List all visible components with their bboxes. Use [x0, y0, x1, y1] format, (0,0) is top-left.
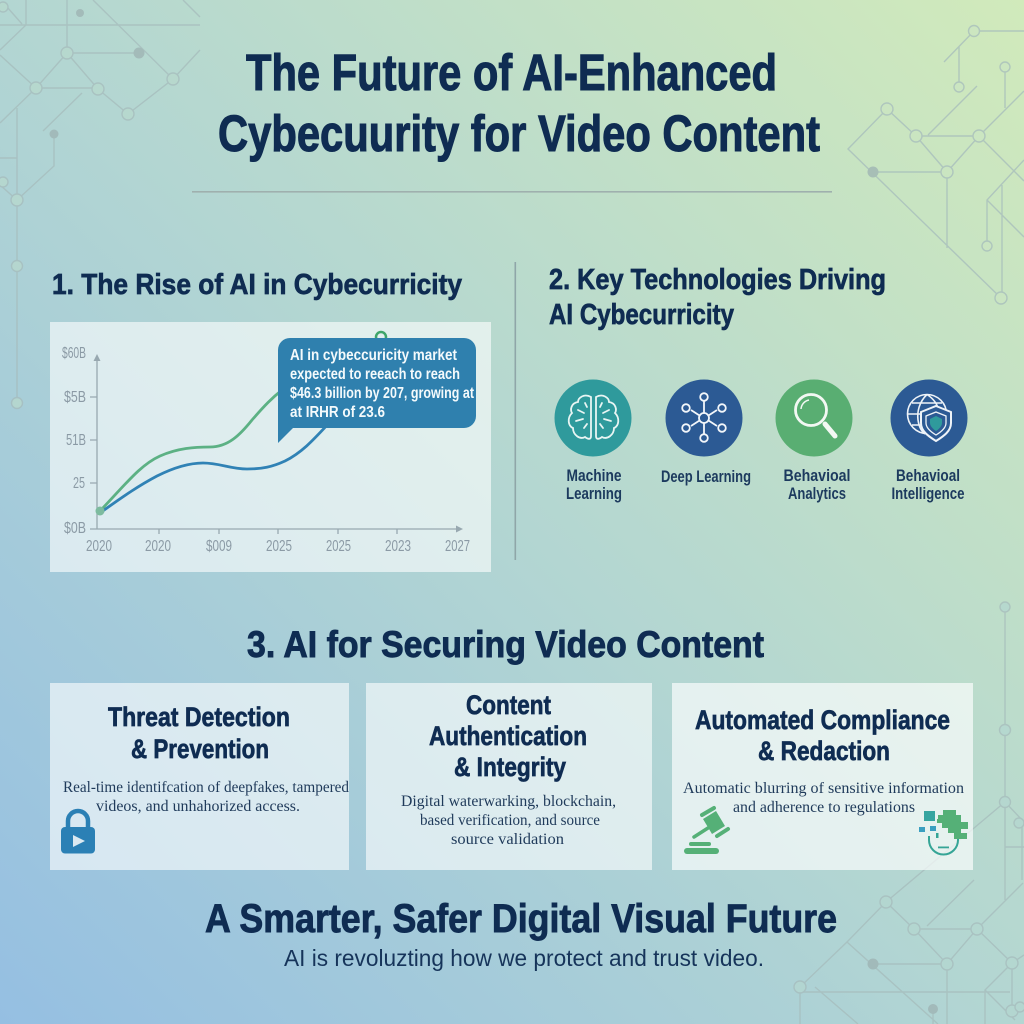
label: behavioral intelligence	[892, 466, 964, 503]
panel: market growth chart	[50, 322, 491, 572]
title: The Future of AI-Enhanced	[246, 44, 777, 101]
icon: redacted face	[919, 810, 968, 854]
card title: Content	[466, 690, 551, 720]
closing heading: A Smarter, Safer Digital Visual Future	[205, 897, 837, 941]
axis labels: $009	[206, 538, 232, 555]
label: machine learning: Learning	[566, 484, 622, 503]
heading: section 2: 2. Key Technologies Driving	[549, 264, 886, 296]
label: machine learning: Machine	[566, 466, 622, 485]
axis labels: 2020	[86, 538, 112, 555]
card text	[63, 779, 349, 815]
label: behavioral intelligence: Behavioal	[896, 466, 960, 485]
axis labels: 51B	[66, 432, 86, 449]
icon: machine learning brain	[554, 380, 632, 456]
callout: at IRHR of 23.6	[290, 404, 385, 421]
line: blue series	[100, 422, 330, 513]
panel: automated compliance	[672, 683, 973, 870]
card text: Real-time identifcation of deepfakes, tampered	[63, 779, 349, 796]
card title: & Prevention	[131, 734, 269, 764]
callout: expected to reeach to reach	[290, 366, 460, 383]
title: Cybecuurity for Video Content	[218, 105, 820, 162]
heading: section 3: 3. AI for Securing Video Content	[247, 624, 764, 665]
icon: video lock	[61, 811, 95, 854]
axis labels: $5B	[64, 389, 86, 406]
card title	[108, 702, 290, 764]
heading: section 2: AI Cybecurricity	[549, 299, 734, 331]
card text	[683, 780, 964, 816]
card title: & Redaction	[758, 736, 890, 766]
heading: section 1: 1. The Rise of AI in Cybecurricity	[52, 269, 462, 301]
card text: Digital waterwarking, blockchain,	[401, 793, 616, 810]
card title	[429, 690, 587, 782]
card title: Threat Detection	[108, 702, 290, 732]
axis labels: 25	[73, 475, 85, 492]
axis labels: 2025	[266, 538, 292, 555]
card title: & Integrity	[454, 752, 566, 782]
card text: and adherence to regulations	[733, 799, 915, 816]
card text: videos, and unhahorized access.	[96, 798, 300, 815]
axis labels: 2027	[445, 538, 470, 555]
axis labels: 2023	[385, 538, 411, 555]
label: behavioral analytics: Analytics	[788, 484, 846, 503]
panel: threat detection	[50, 683, 349, 870]
icon: deep learning network	[666, 380, 742, 456]
label: behavioral intelligence: Intelligence	[892, 484, 964, 503]
line: green series	[100, 337, 381, 511]
chart axes	[90, 354, 463, 534]
axis labels: $0B	[64, 520, 86, 537]
axis labels: 2020	[145, 538, 171, 555]
card title: Automated Compliance	[695, 705, 950, 735]
icon: globe and shield	[890, 380, 968, 456]
card text: based verification, and source	[420, 812, 600, 829]
panel: content authentication	[366, 683, 652, 870]
axis labels: $60B	[62, 345, 86, 362]
icon: magnifying glass	[776, 380, 852, 456]
card title: Authentication	[429, 721, 587, 751]
label: behavioral analytics	[784, 466, 850, 503]
card text: Automatic blurring of sensitive information	[683, 780, 964, 797]
heading: section 2	[549, 264, 886, 331]
callout: $46.3 billion by 207, growing at	[290, 385, 475, 402]
callout: AI in cybeccuricity market	[290, 347, 458, 364]
label: machine learning	[566, 466, 622, 503]
icon: gavel	[684, 808, 728, 854]
card text: source validation	[451, 831, 564, 848]
card text	[401, 793, 616, 848]
label: deep learning: Deep Learning	[661, 467, 751, 486]
label: behavioral analytics: Behavioal	[784, 466, 850, 485]
axis labels	[62, 345, 470, 555]
axis labels: 2025	[326, 538, 351, 555]
callout	[278, 338, 476, 443]
closing subtitle: AI is revoluzting how we protect and trust video.	[284, 945, 764, 971]
title	[218, 44, 820, 162]
card title	[695, 705, 950, 766]
